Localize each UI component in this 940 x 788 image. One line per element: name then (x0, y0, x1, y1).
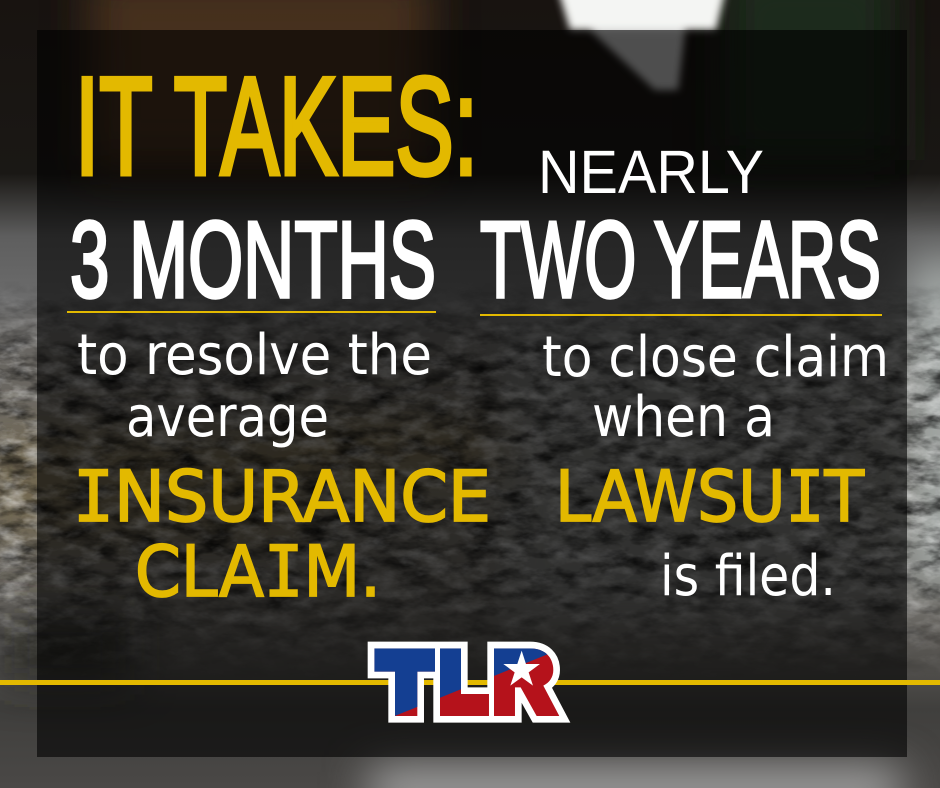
underline: two years (480, 314, 882, 316)
gold horizontal rule (0, 680, 940, 685)
text: to close claim: to close claim (542, 325, 889, 390)
text: nearly: NEARLY (538, 138, 764, 206)
text: lawsuit: LAWSUIT (555, 456, 864, 538)
text: when a: when a (592, 385, 775, 450)
panel: lawsuit column (480, 138, 889, 609)
text: insurance: INSURANCE (73, 456, 491, 538)
text: is filed: is filed. (660, 544, 836, 609)
text: to resolve the: to resolve the (77, 323, 432, 388)
panel: insurance claim column (67, 199, 491, 613)
underline: 3 months (67, 311, 436, 313)
logo: TLR (367, 640, 560, 727)
stat: 3 months: 3 MONTHS (70, 199, 436, 321)
text: claim: CLAIM. (135, 531, 381, 613)
text: average: average (126, 385, 329, 450)
heading: it takes: IT TAKES: (75, 49, 478, 204)
